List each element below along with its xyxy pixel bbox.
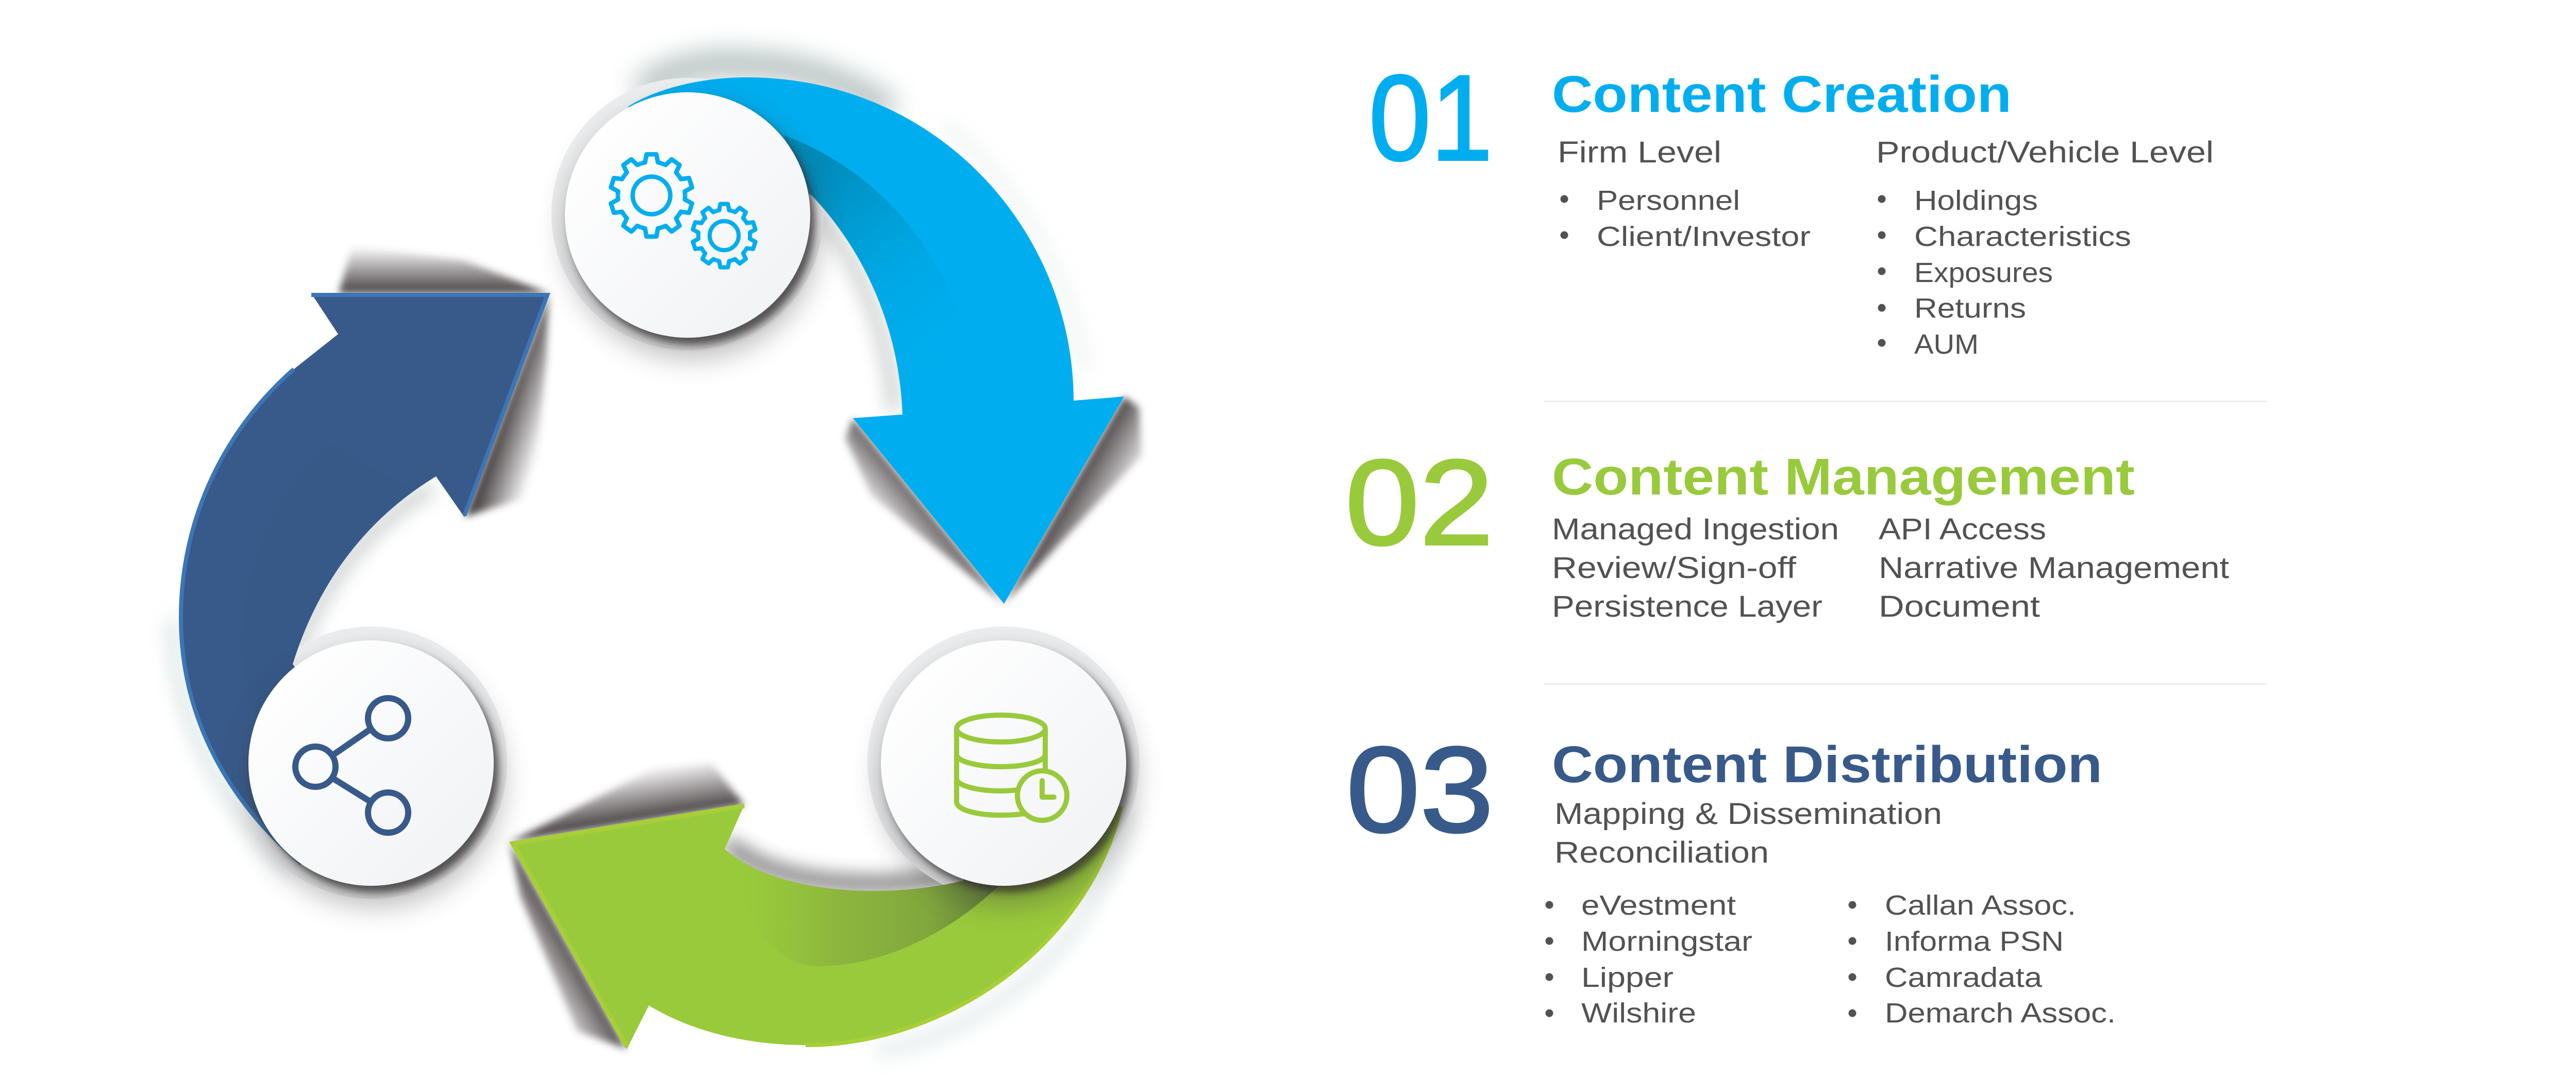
list: management right column: Document [1879,590,2040,623]
column: product vehicle level [1876,136,2214,360]
text: mapping and reconciliation [1554,797,1942,869]
icon: gears [609,154,757,267]
number 01: 01 [1369,50,1493,186]
list: distribution left column: eVestment [1581,890,1736,921]
column: product vehicle level: Characteristics [1914,221,2131,252]
list: management right column [1879,513,2229,623]
arrow: blue content creation [628,77,1124,604]
column: product vehicle level: Product/Vehicle Level [1876,136,2214,169]
arrow drop shadows [173,63,1142,1052]
list: distribution left column: Morningstar [1581,926,1752,957]
list: management right column: API Access [1879,513,2046,546]
list: management left column [1552,513,1839,623]
column: firm level: Personnel [1597,185,1740,216]
arrow: green content management [510,805,1121,1049]
number 03: 03 [1346,722,1494,858]
column: firm level: Client/Investor [1597,221,1811,252]
heading: content creation: Content Creation [1552,65,2012,123]
list: distribution left column [1545,890,1752,1029]
arrow: navy content distribution [181,293,549,864]
list: distribution right column: Informa PSN [1885,926,2064,957]
list: management left column: Managed Ingestion [1552,513,1839,546]
list: distribution right column: Camradata [1885,962,2043,993]
column: product vehicle level: Holdings [1914,185,2038,216]
icon: database with clock [957,715,1067,820]
column: product vehicle level: AUM [1914,329,1979,360]
node: share icon disc [247,640,503,906]
node: gears icon disc [564,92,819,358]
section 03: content distribution [1346,722,2116,1029]
section 02: content management [1345,435,2229,623]
list: management left column: Persistence Layer [1552,590,1822,623]
list: management right column: Narrative Management [1879,551,2229,585]
list: distribution right column: Demarch Assoc. [1885,998,2116,1029]
heading: content distribution: Content Distribution [1552,736,2102,794]
list: distribution right column: Callan Assoc. [1885,890,2076,921]
section 01: content creation [1369,50,2214,360]
column: firm level [1558,136,1811,252]
text: mapping and reconciliation: Reconciliation [1554,836,1769,869]
column: product vehicle level: Returns [1914,293,2026,324]
column: product vehicle level: Exposures [1914,257,2053,288]
list: distribution left column: Wilshire [1581,998,1696,1029]
list: distribution left column: Lipper [1581,962,1674,993]
heading: content management: Content Management [1552,448,2135,506]
list: management left column: Review/Sign-off [1552,551,1797,585]
column: firm level: Firm Level [1558,136,1721,169]
list: distribution right column [1848,890,2116,1029]
node: database clock icon disc [880,640,1135,906]
icon: share nodes [295,698,408,833]
node rings [235,78,1140,899]
text: mapping and reconciliation: Mapping & Dissemination [1554,797,1942,831]
number 02: 02 [1345,435,1494,571]
